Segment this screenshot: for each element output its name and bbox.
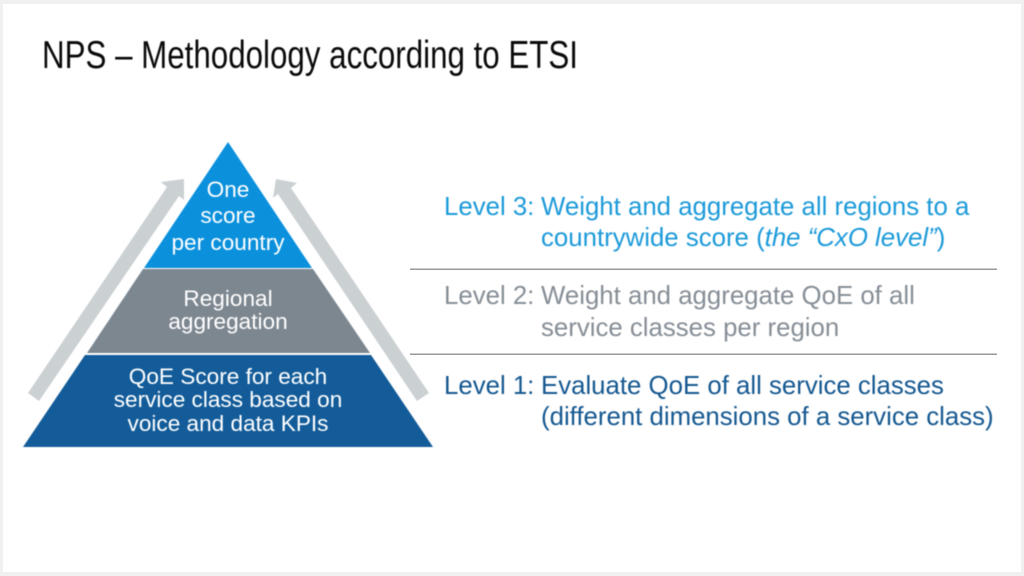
pyramid tier: regional aggregation	[87, 269, 370, 353]
level 3 description: countrywide score (the “CxO level”)	[541, 224, 945, 252]
level 1 description: Evaluate QoE of all service classes	[541, 372, 944, 400]
level 2 description: Level 2:	[444, 282, 534, 310]
pyramid tier: QoE score: voice and data KPIs	[128, 411, 328, 436]
level 2 description: Weight and aggregate QoE of all	[541, 282, 915, 310]
level 3 description: Weight and aggregate all regions to a	[541, 193, 970, 221]
level 1 description	[444, 372, 994, 431]
pyramid tier: one score per country: score	[200, 203, 256, 228]
pyramid tier: regional aggregation: aggregation	[168, 309, 288, 334]
level 1 description: Level 1:	[444, 372, 534, 400]
level 1 description: (different dimensions of a service class)	[541, 403, 994, 431]
level 3 description	[444, 193, 970, 252]
pyramid tier: one score per country: One	[207, 177, 249, 202]
pyramid	[23, 142, 433, 447]
pyramid tier: regional aggregation: Regional	[183, 286, 273, 311]
level 2 description: service classes per region	[541, 314, 839, 342]
pyramid tier: one score per country	[144, 142, 312, 268]
pyramid tier: QoE score	[23, 355, 433, 447]
level 2 description	[444, 282, 915, 342]
pyramid tier: QoE score: QoE Score for each	[129, 364, 327, 389]
arrow: right upward	[273, 179, 429, 401]
pyramid tier: QoE score: service class based on	[114, 387, 342, 412]
level 3 description: Level 3:	[444, 193, 534, 221]
title: NPS – Methodology according to ETSI	[42, 34, 578, 77]
arrow: left upward	[28, 179, 184, 401]
pyramid tier: one score per country: per country	[171, 230, 285, 255]
